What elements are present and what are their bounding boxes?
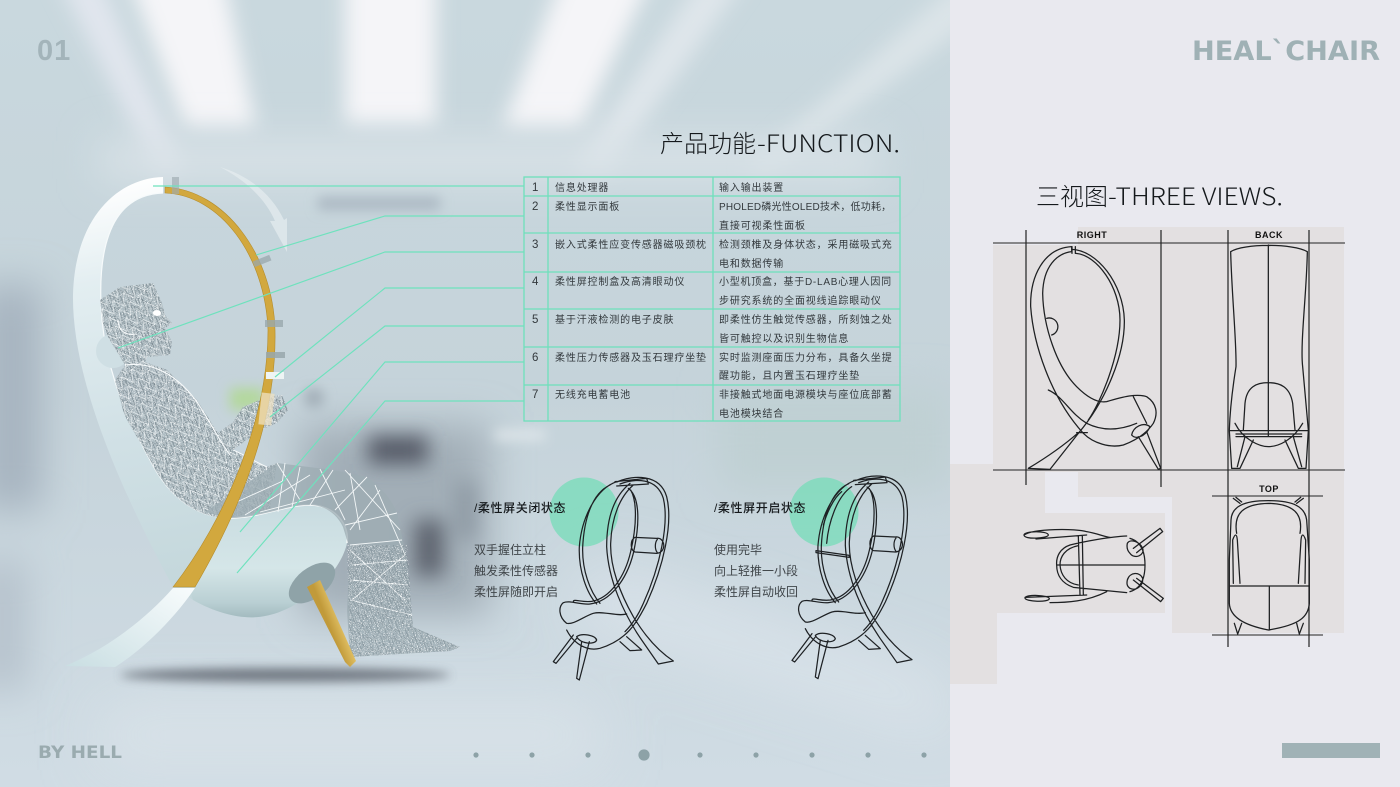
illustration: chair with seated wireframe figure — [65, 167, 460, 682]
callout leader lines — [118, 186, 524, 573]
top view drawing — [1229, 497, 1309, 634]
white foot — [65, 588, 195, 667]
row 4 — [532, 275, 892, 307]
closed state text: 柔性屏随即开启 — [474, 584, 558, 599]
stepped grey blocks behind views — [950, 227, 1344, 684]
line chair: screen open — [792, 476, 912, 679]
row 6: 醒功能，且内置玉石理疗坐垫 — [719, 369, 860, 382]
view labels: TOP — [1259, 484, 1279, 494]
arrow: downward swing — [220, 167, 287, 252]
open state text: 向上轻推一小段 — [714, 563, 798, 578]
row 7: 非接触式地面电源模块与座位底部蓄 — [719, 388, 893, 401]
shell inner highlight — [101, 193, 230, 518]
panel: right side views background — [950, 0, 1400, 787]
pagination dots — [473, 749, 927, 761]
row 3: 3 — [532, 239, 538, 251]
back view drawing — [1229, 245, 1308, 468]
neck pillow — [96, 334, 130, 368]
row 2: 直接可视柔性面板 — [719, 219, 806, 232]
heading: three views — [1036, 177, 1283, 212]
heading: function — [660, 124, 900, 159]
seat bowl — [190, 505, 347, 617]
row 3: 嵌入式柔性应变传感器磁吸颈枕 — [555, 238, 707, 251]
row 2 — [532, 200, 892, 232]
row 7: 无线充电蓄电池 — [555, 388, 631, 401]
function table — [524, 177, 900, 421]
wooden leg — [307, 580, 356, 667]
view labels: BACK — [1255, 230, 1283, 240]
row 4: 4 — [532, 276, 539, 288]
row 6: 实时监测座面压力分布，具备久坐提 — [719, 351, 893, 364]
row 4: 柔性屏控制盒及高清眼动仪 — [555, 275, 685, 288]
heading: three views: -THREE VIEWS. — [1108, 177, 1283, 212]
wooden upright band — [165, 187, 275, 587]
row 4: 小型机顶盒，基于D-LAB心理人因同 — [719, 275, 892, 288]
row 7: 电池模块结合 — [719, 407, 784, 420]
green highlight circles — [550, 478, 858, 546]
wireframe figure: legs — [205, 463, 460, 657]
closed state text: /柔性屏关闭状态 — [474, 500, 566, 515]
row 6: 6 — [532, 352, 538, 364]
brand title: HEAL`CHAIR — [1192, 36, 1380, 67]
row 3: 电和数据传输 — [719, 257, 784, 270]
row 5 — [532, 313, 893, 345]
row 3: 检测颈椎及身体状态，采用磁吸式充 — [719, 238, 893, 251]
row 1: 1 — [532, 182, 538, 194]
heading: function: 产品功能 — [660, 124, 756, 159]
wireframe figure: torso and head — [100, 283, 288, 518]
row 1: 信息处理器 — [555, 181, 609, 194]
open state text — [714, 500, 806, 599]
row 4: 步研究系统的全面视线追踪眼动仪 — [719, 294, 882, 307]
seat highlight edge — [230, 505, 347, 543]
technical drawing: guide lines — [993, 230, 1345, 647]
white chair shell — [73, 177, 347, 617]
row 7 — [532, 388, 893, 420]
translucent sensor bands — [172, 177, 285, 379]
view labels — [1077, 230, 1283, 494]
right view drawing — [1028, 247, 1161, 469]
seat hole — [281, 555, 343, 611]
open state text: 使用完毕 — [714, 542, 762, 557]
page number: 01 — [37, 35, 71, 67]
row 5: 皆可触控以及识别生物信息 — [719, 332, 849, 345]
line chair: screen closed — [553, 477, 673, 680]
row 2: 2 — [532, 201, 538, 213]
closed state text — [474, 500, 566, 599]
heading: function: -FUNCTION. — [757, 124, 900, 159]
table grid — [524, 177, 900, 421]
row 1 — [532, 181, 784, 194]
row 6: 柔性压力传感器及玉石理疗坐垫 — [555, 351, 707, 364]
row 7: 7 — [532, 389, 538, 401]
row 5: 基于汗液检测的电子皮肤 — [555, 313, 674, 326]
row 5: 即柔性仿生触觉传感器，所刻蚀之处 — [719, 313, 893, 326]
panel: blurred hospital background — [0, 0, 975, 787]
grey corner bar — [1282, 743, 1380, 758]
heading: three views: 三视图 — [1036, 177, 1108, 212]
side plan view drawing — [1024, 528, 1163, 603]
hand speckle on band — [258, 392, 275, 426]
row 2: 柔性显示面板 — [555, 200, 620, 213]
open state text: 柔性屏自动收回 — [714, 585, 798, 599]
row 2: PHOLED磷光性OLED技术，低功耗， — [719, 200, 892, 213]
row 3 — [532, 238, 893, 270]
closed state text: 触发柔性传感器 — [474, 563, 558, 578]
open state text: /柔性屏开启状态 — [714, 500, 806, 515]
row 5: 5 — [532, 314, 538, 326]
signature: BY HELL — [38, 743, 123, 762]
ground shadow — [120, 668, 450, 682]
row 1: 输入输出装置 — [719, 181, 784, 194]
view labels: RIGHT — [1077, 230, 1107, 240]
closed state text: 双手握住立柱 — [474, 542, 546, 557]
row 6 — [532, 351, 893, 382]
